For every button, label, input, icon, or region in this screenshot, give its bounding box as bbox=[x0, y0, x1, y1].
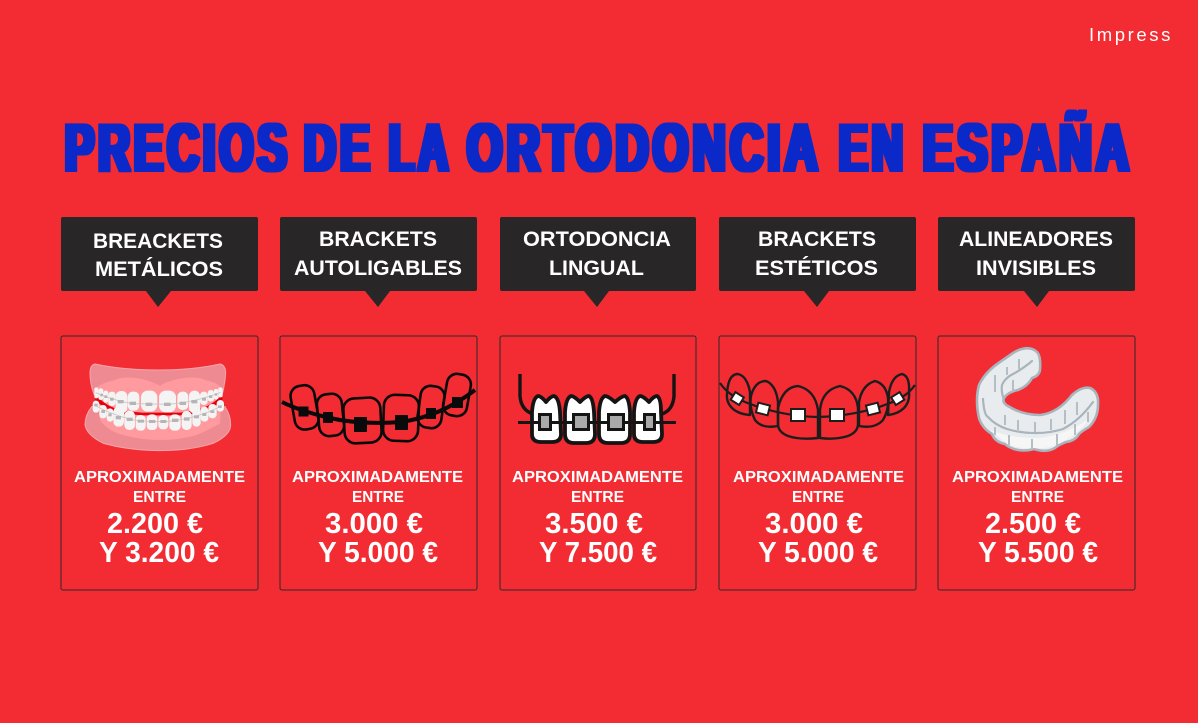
callout label: ORTODONCIA bbox=[523, 228, 671, 251]
intro text bbox=[512, 469, 683, 506]
callout label bbox=[280, 217, 477, 307]
title bbox=[65, 110, 1133, 186]
column: brackets metálicos bbox=[61, 217, 258, 590]
icon: aesthetic brackets bbox=[720, 374, 915, 439]
price range bbox=[99, 508, 219, 569]
price range bbox=[318, 508, 438, 569]
callout label: INVISIBLES bbox=[976, 257, 1096, 280]
price range: Y 3.200 € bbox=[99, 537, 219, 569]
intro text: APROXIMADAMENTE bbox=[292, 469, 463, 486]
callout label: BRACKETS bbox=[758, 228, 876, 251]
callout label bbox=[500, 217, 696, 307]
price range: 2.500 € bbox=[985, 508, 1081, 540]
intro text bbox=[952, 469, 1123, 506]
intro text: ENTRE bbox=[352, 489, 404, 506]
column: alineadores invisibles bbox=[938, 217, 1135, 590]
icon: teeth with metal brackets bbox=[85, 364, 231, 451]
price range: Y 5.000 € bbox=[758, 537, 878, 569]
callout label: ALINEADORES bbox=[959, 228, 1113, 251]
callout label: ESTÉTICOS bbox=[755, 257, 878, 280]
card frame bbox=[61, 336, 258, 590]
callout label bbox=[938, 217, 1135, 307]
callout label: BREACKETS bbox=[93, 230, 223, 253]
intro text: ENTRE bbox=[571, 489, 624, 506]
callout label: BRACKETS bbox=[319, 228, 437, 251]
intro text: ENTRE bbox=[133, 489, 186, 506]
intro text: ENTRE bbox=[792, 489, 844, 506]
card frame bbox=[938, 336, 1135, 590]
callout label bbox=[61, 217, 258, 307]
column: ortodoncia lingual bbox=[500, 217, 696, 590]
callout label bbox=[719, 217, 916, 307]
card frame bbox=[280, 336, 477, 590]
intro text: ENTRE bbox=[1011, 489, 1064, 506]
callout label: LINGUAL bbox=[549, 257, 644, 280]
column: brackets estéticos bbox=[719, 217, 916, 590]
card frame bbox=[719, 336, 916, 590]
price range: 3.000 € bbox=[325, 508, 423, 540]
brand logo: Impress bbox=[1089, 24, 1173, 45]
icon: lingual brackets bbox=[518, 374, 676, 443]
title: EN bbox=[839, 110, 907, 186]
price range: Y 7.500 € bbox=[539, 537, 657, 569]
title: DE bbox=[304, 110, 374, 186]
card frame bbox=[500, 336, 696, 590]
price range: 2.200 € bbox=[107, 508, 203, 540]
intro text bbox=[74, 469, 245, 506]
intro text: APROXIMADAMENTE bbox=[74, 469, 245, 486]
price range: 3.000 € bbox=[765, 508, 863, 540]
price range bbox=[978, 508, 1098, 569]
title: ORTODONCIA bbox=[467, 110, 822, 186]
intro text bbox=[292, 469, 463, 506]
intro text bbox=[733, 469, 904, 506]
price range: 3.500 € bbox=[545, 508, 643, 540]
price range bbox=[539, 508, 657, 569]
intro text: APROXIMADAMENTE bbox=[733, 469, 904, 486]
price range: Y 5.000 € bbox=[318, 537, 438, 569]
title: PRECIOS bbox=[65, 110, 291, 186]
icon: clear aligner bbox=[977, 348, 1098, 451]
title: LA bbox=[389, 110, 452, 186]
price range bbox=[758, 508, 878, 569]
icon: self-ligating brackets bbox=[282, 372, 475, 444]
callout label: AUTOLIGABLES bbox=[294, 257, 462, 280]
column: brackets autoligables bbox=[280, 217, 477, 590]
price range: Y 5.500 € bbox=[978, 537, 1098, 569]
intro text: APROXIMADAMENTE bbox=[952, 469, 1123, 486]
callout label: METÁLICOS bbox=[95, 258, 223, 281]
intro text: APROXIMADAMENTE bbox=[512, 469, 683, 486]
